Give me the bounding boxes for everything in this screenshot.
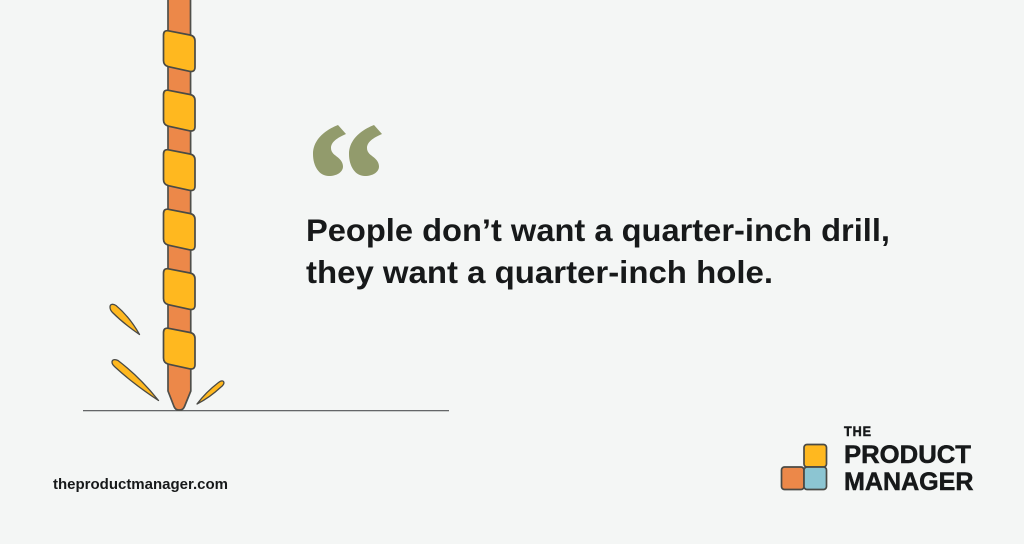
logo wordmark: THE: [844, 424, 872, 439]
quote text: People don’t want a quarter-inch drill,: [306, 212, 890, 248]
drill spiral band 6: [164, 328, 195, 369]
logo wordmark: PRODUCT: [844, 441, 971, 469]
icon: drill bit: [164, 0, 195, 410]
drill spiral band 2: [164, 90, 195, 131]
icon: debris sparks: [110, 304, 224, 404]
logo: The Product Manager: [782, 424, 974, 496]
quote text: they want a quarter-inch hole.: [306, 254, 773, 290]
drill spiral band 4: [164, 209, 195, 250]
spark lower left: [112, 360, 158, 400]
quote text: [306, 212, 890, 290]
logo wordmark: MANAGER: [844, 468, 974, 496]
spark upper left: [110, 304, 140, 334]
icon: opening quotation mark: [313, 125, 382, 176]
drill spiral band 3: [164, 150, 195, 191]
logo icon: coloured blocks: [782, 444, 826, 490]
drill spiral band 1: [164, 31, 195, 72]
logo wordmark: [844, 424, 974, 496]
drill shaft: [168, 0, 191, 410]
spark right: [197, 381, 224, 404]
ground line: [83, 410, 449, 412]
drill spiral band 5: [164, 269, 195, 310]
website url: theproductmanager.com: [53, 477, 228, 493]
